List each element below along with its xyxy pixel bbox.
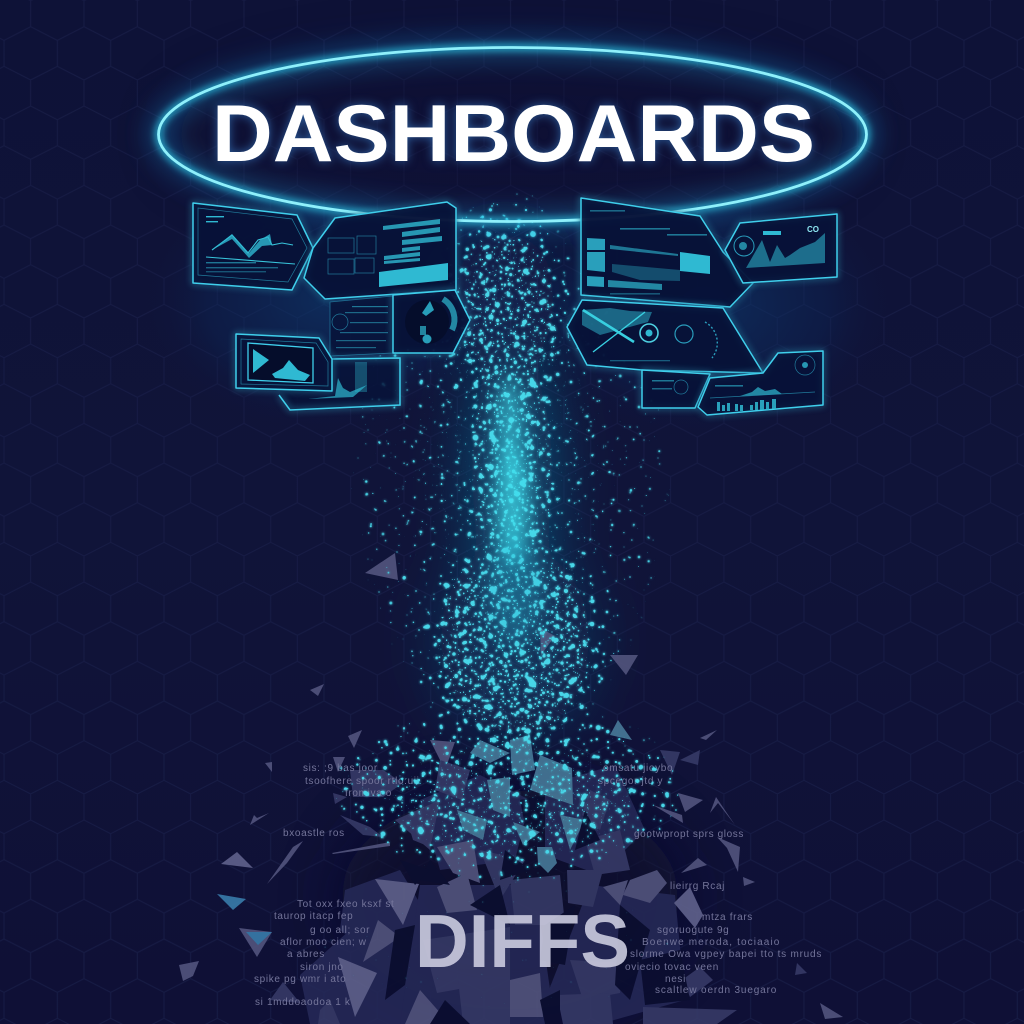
panel: bar chart [698,351,823,415]
small garbled diff text, left: g oo all; sor [310,925,370,936]
small garbled diff text, right: slorme Owa vgpey bapei tto ts mruds [630,949,822,960]
title ring [158,48,866,222]
small garbled diff text, left: aflor moo cien; w [280,937,367,948]
small garbled diff text, left: fromiva o [345,788,392,799]
panel: radial gauge [393,290,470,353]
small garbled diff text, left: tsoofhere spoor rtlo:uii [305,776,420,787]
small garbled diff text, right: mtza frars [702,912,753,923]
small garbled diff text, left: bxoastle ros [283,828,345,839]
small garbled diff text, left: siron jno [300,962,344,973]
panel: text readout [330,296,393,356]
panel: area chart [725,214,837,283]
small garbled diff text, left: sis: ;9 bas joor [303,763,378,774]
small garbled diff text, right: sgoruogute 9g [657,925,729,936]
small garbled diff text, right [598,763,822,996]
glow behind particle column [440,230,590,735]
panel: area chart: CO [807,225,819,234]
label: DIFFS: DIFFS [415,899,630,983]
panel: lower area chart [279,358,400,410]
panel: bars and cards [304,202,456,299]
small garbled diff text, right: lieirrg Rcaj [670,881,725,892]
small garbled diff text, right: spcegor jtd y [598,776,663,787]
small garbled diff text, left: taurop itacp fep [274,911,353,922]
bright particle core [487,375,543,645]
right dashboard panels [567,198,837,415]
shattered shards [179,553,843,1024]
small garbled diff text, right: oviecio tovac veen [625,962,719,973]
small garbled diff text, right: omsatu jioybo [603,763,673,774]
panel: radial scan [567,300,763,373]
small garbled diff text, left: si 1mddoaodoa 1 k [255,997,351,1008]
panel: table and charts [581,198,753,307]
title: DASHBOARDS: DASHBOARDS [212,89,815,179]
small garbled diff text, left: Tot oxx fxeo ksxf st [297,899,394,910]
small garbled diff text, left: spike pg wmr i ato [254,974,346,985]
particle stream [324,193,708,1004]
small garbled diff text, right: Boenwe meroda, tociaaio [642,937,780,948]
small garbled diff text, left: a abres [287,949,325,960]
small garbled diff text, right: nesi [665,974,686,985]
small garbled diff text, right: gootwpropt sprs gloss [634,829,744,840]
small garbled diff text, left [254,763,420,1008]
panel: line chart [193,203,313,290]
panel: image thumbnail [236,334,332,391]
left dashboard panels [193,202,470,410]
panel: gauge readout [642,370,710,408]
small garbled diff text, right: scaltlew oerdn 3uegaro [655,985,777,996]
